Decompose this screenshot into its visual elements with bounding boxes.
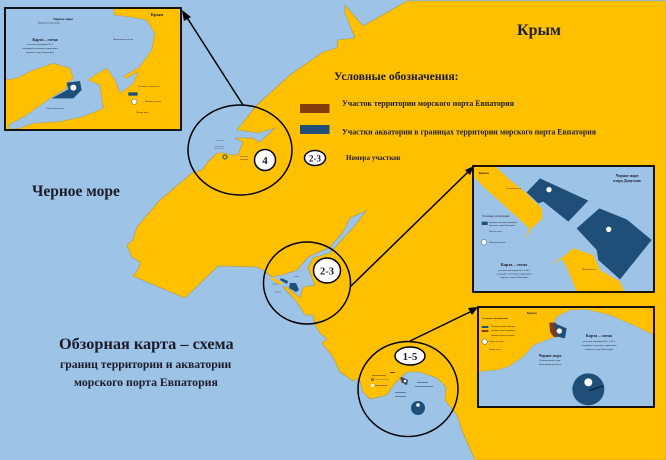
badge: 1-5: [395, 347, 425, 365]
title block: границ территории и акватории: [60, 358, 232, 371]
mini map details: circle 4: [214, 140, 248, 160]
badge: 2-3: 2-3: [320, 266, 334, 278]
inset map: sections 1 and 5: входящих в границы территории: [582, 344, 617, 347]
callout circle: sections 1-5: [358, 342, 458, 436]
title block: [59, 334, 234, 389]
inset map: sections 1 and 5: Карта – схема: [586, 333, 613, 338]
legend item: water area: Участки акватории в границах территории морского порта Евпатория: [342, 128, 597, 136]
inset map: sections 2-3: входящих в границы территории: [497, 272, 532, 276]
inset map: sections 1 and 5: Условные обозначения: [482, 317, 508, 320]
heading: Crimea: Крым: [517, 22, 561, 39]
inset map: sections 2-3: Черное море: [616, 173, 639, 178]
inset map: sections 2-3: участков акватории № 2 и № 3: [498, 269, 531, 272]
mini map details: circle 1-5: [371, 372, 433, 415]
badge: 4: 4: [262, 155, 268, 167]
inset map: sections 2-3: Границы участков акватории: [489, 222, 518, 224]
mini map details: circle 2-3: [272, 276, 299, 292]
legend item: port territory: Участок территории морского порта Евпатория: [342, 99, 515, 108]
badge: 2-3: [314, 258, 340, 283]
inset map: sections 2-3: Номера участков: [489, 242, 506, 244]
inset map: section 4: Черное море: [53, 17, 73, 21]
legend item: section numbers: Номера участков: [346, 154, 401, 162]
inset map: section 4: Условные обозначения: [138, 85, 159, 88]
inset map: sections 1 and 5: Каламитский залив: [540, 359, 561, 362]
legend: [300, 70, 597, 166]
title block: Обзорная карта – схема: [59, 334, 234, 353]
inset map: section 4: Каркинитский залив: [38, 22, 61, 24]
inset map: section 4: Ярылгачская бухта: [113, 38, 134, 41]
inset map: sections 2-3: Северная коса: [506, 187, 522, 190]
inset map: sections 2-3: озеро Донузлав: [613, 178, 642, 183]
inset map: sections 1 and 5: Евпаторийская бухта: [539, 363, 562, 366]
legend item: section numbers: 2-3: [309, 154, 321, 164]
legend item: port territory: [300, 99, 515, 113]
inset map: sections 2-3: Условные обозначения: [482, 215, 510, 218]
inset map: sections 2-3: Карта – схема: [501, 262, 528, 267]
inset map: sections 1 and 5: Границы участков акватории: [491, 326, 516, 328]
inset map: sections 1 and 5: морского порта Евпатория: [585, 348, 614, 351]
legend title: Условные обозначения:: [334, 70, 459, 83]
inset map: sections 2-3: Южная коса: [582, 268, 596, 271]
heading: Black Sea: Черное море: [32, 183, 120, 200]
inset map: sections 1 and 5: Крым: [527, 311, 537, 315]
inset map: section 4: [5, 8, 182, 130]
arrow: circle 1-5 to inset: [410, 307, 478, 341]
inset map: section 4: Крым: [151, 12, 163, 17]
inset map: section 4: входящих в границы территории: [23, 47, 58, 50]
inset map: sections 2-3: [473, 166, 654, 292]
inset map: sections 2-3: морского порта Евпатория: [489, 225, 516, 227]
inset map: sections 2-3: морского порта Евпатория: [500, 276, 529, 279]
inset map: section 4: участков акватории № 4: [27, 43, 54, 46]
arrow: circle 2-3 to inset: [350, 166, 474, 287]
inset map: sections 1 and 5: [478, 307, 654, 407]
inset map: section 4: Карта – схема: [32, 37, 58, 42]
inset map: section 4: морского порта Евпатория: [26, 51, 55, 54]
inset map: sections 1 and 5: Границы и номера участков: [491, 335, 515, 337]
inset map: sections 2-3: Крым: [479, 171, 489, 175]
inset map: sections 1 and 5: Номера участков: [489, 341, 503, 343]
title block: морского порта Евпатория: [74, 375, 218, 389]
callout circle: section 4: [188, 105, 292, 195]
inset map: sections 1 and 5: Номера точек: [489, 349, 501, 351]
legend item: water area: [300, 125, 597, 136]
inset map: section 4: Номера точек: [136, 112, 150, 114]
inset map: section 4: Номера участков: [145, 101, 161, 103]
inset map: sections 1 and 5: Черное море: [539, 353, 562, 358]
arrow: circle 4 to inset: [182, 10, 243, 105]
inset map: sections 1 and 5: Граница участка территории: [491, 330, 516, 332]
legend item: section numbers: [304, 150, 401, 166]
callout circle: sections 2-3: [264, 242, 350, 324]
badge: 1-5: 1-5: [403, 351, 418, 363]
inset map: section 4: Озеро Донузлав: [46, 107, 64, 110]
badge: 4: [254, 150, 276, 170]
inset map: sections 1 and 5: участков акватории № 1 и № 5: [583, 340, 616, 343]
inset map: sections 2-3: Номера точек: [489, 231, 503, 233]
